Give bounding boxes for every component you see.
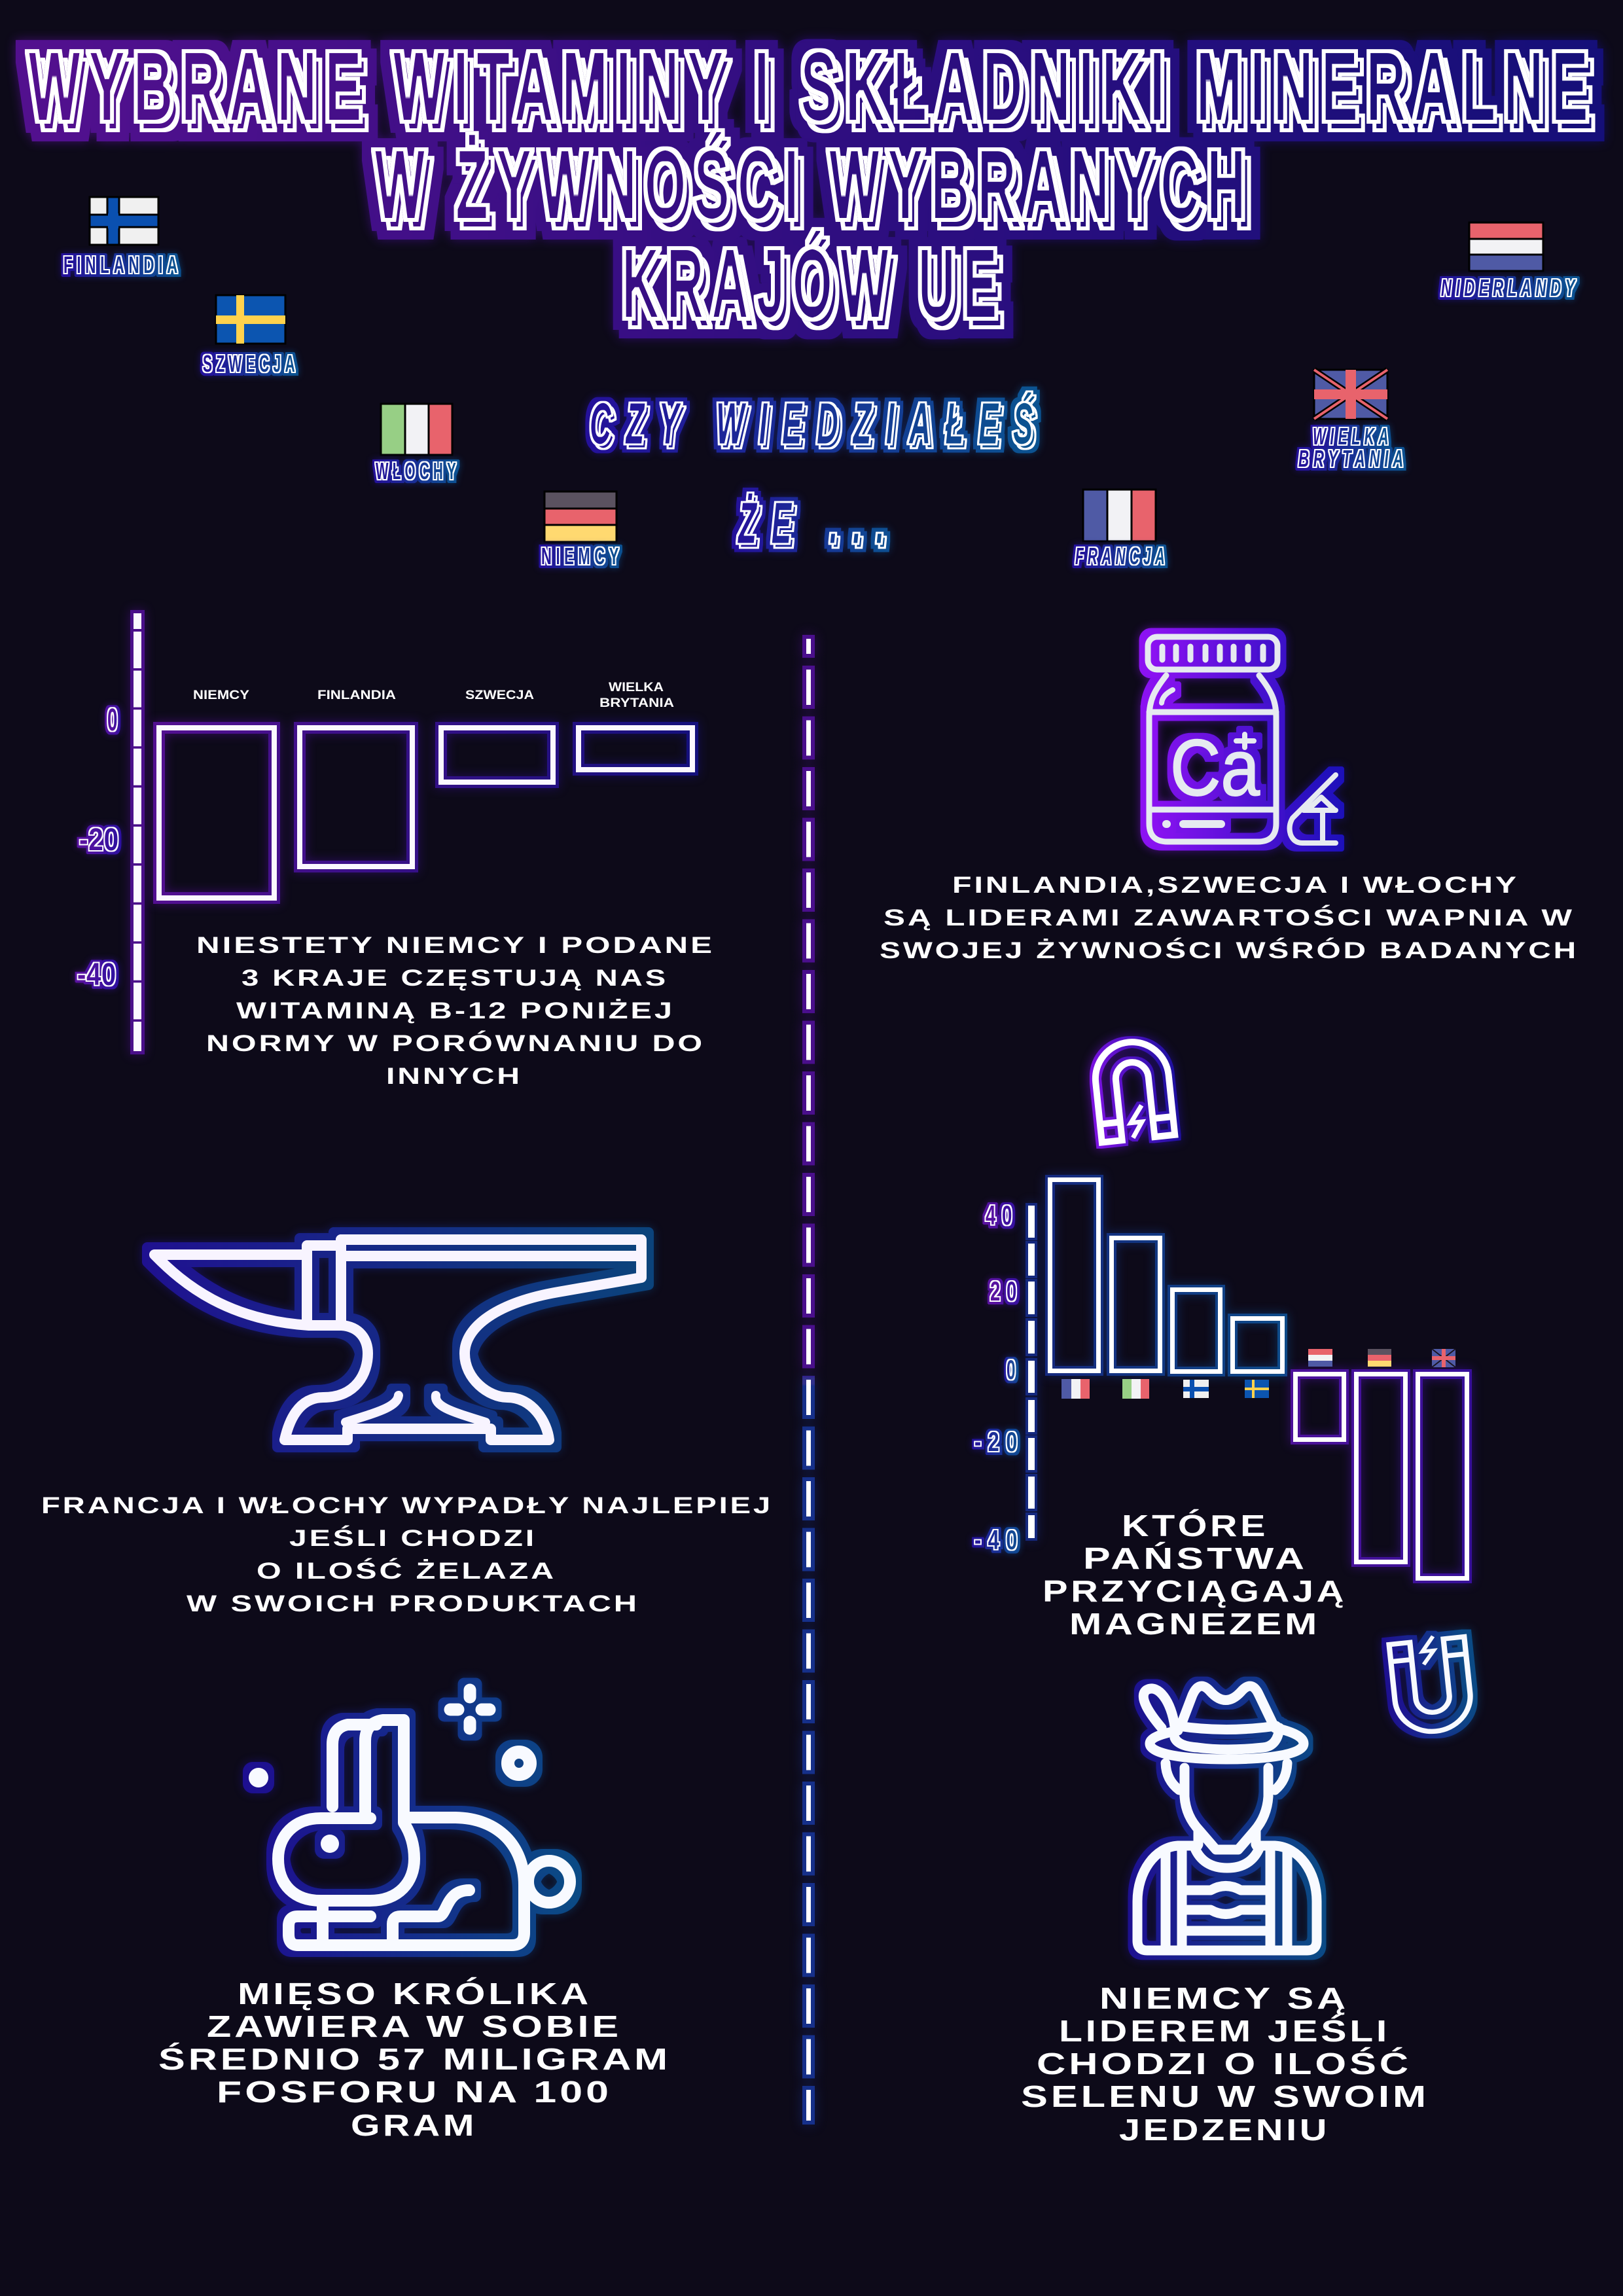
flag: Włochy: [381, 404, 452, 455]
text: B-12 caption: WITAMINĄ B-12 PONIŻEJ: [236, 998, 675, 1024]
text: selenium caption: [1021, 1981, 1429, 2147]
flag: Niemcy: [544, 492, 616, 542]
text: calcium caption: FINLANDIA,SZWECJA I WŁOCHY: [952, 872, 1519, 898]
panel: phosphorus: [158, 1690, 671, 2142]
axis tick labels: 40: [986, 1200, 1018, 1230]
icon: magnet top: [1092, 1039, 1175, 1142]
text: iron caption: W SWOICH PRODUKTACH: [187, 1591, 639, 1617]
bar labels: WIELKA: [609, 681, 664, 694]
flag labels: FINLANDIA: [63, 251, 182, 278]
text: iron caption: [41, 1493, 773, 1617]
text: phosphorus caption: ZAWIERA W SOBIE: [207, 2009, 622, 2043]
text: phosphorus caption: ŚREDNIO 57 MILIGRAM: [158, 2042, 671, 2076]
text: B-12 caption: NORMY W PORÓWNANIU DO: [206, 1030, 705, 1056]
mini flag: Niderlandy: [1308, 1349, 1332, 1367]
text: B-12 caption: [196, 933, 715, 1089]
text: selenium caption: SELENU W SWOIM: [1021, 2079, 1429, 2113]
title: [28, 33, 1596, 338]
flag labels: BRYTANIA: [1298, 445, 1408, 472]
mini flag: Francja: [1061, 1379, 1090, 1399]
text: iron caption: FRANCJA I WŁOCHY WYPADŁY NAJLEPIEJ: [41, 1493, 773, 1518]
bar labels: [193, 681, 674, 710]
axis tick labels: -40: [974, 1524, 1024, 1555]
panel: vitamin B-12 chart: [77, 613, 715, 1089]
text: calcium caption: SWOJEJ ŻYWNOŚCI WŚRÓD BADANYCH: [880, 937, 1578, 963]
text: iron caption: O ILOŚĆ ŻELAZA: [257, 1558, 556, 1584]
flag labels: [63, 251, 1579, 569]
country flags with labels: [63, 197, 1579, 569]
text: phosphorus caption: [158, 1977, 671, 2142]
mini flag: Włochy: [1122, 1379, 1149, 1399]
mini flags: [1061, 1349, 1455, 1399]
axis tick labels: 0: [1007, 1354, 1016, 1385]
text: phosphorus caption: GRAM: [351, 2108, 477, 2142]
flag: Francja: [1083, 490, 1156, 541]
panel: calcium: [880, 637, 1578, 963]
mini flag: Szwecja: [1245, 1380, 1269, 1398]
bar labels: NIEMCY: [193, 689, 249, 702]
text: iron caption: JEŚLI CHODZI: [289, 1525, 537, 1551]
icon: anvil: [154, 1240, 641, 1440]
axis tick labels: -20: [79, 823, 119, 857]
text: phosphorus caption: MIĘSO KRÓLIKA: [238, 1977, 592, 2011]
mini flag: Niemcy: [1368, 1349, 1391, 1367]
text: calcium caption: SĄ LIDERAMI ZAWARTOŚCI WAPNIA W: [883, 905, 1575, 931]
subtitle: czy wiedziałeś że: [590, 392, 1048, 555]
icon: farmer: [1137, 1686, 1317, 1950]
bar labels: FINLANDIA: [317, 689, 396, 702]
text: selenium caption: LIDEREM JEŚLI: [1059, 2014, 1390, 2048]
axis tick labels: 20: [990, 1276, 1023, 1306]
mini flag: Finlandia: [1183, 1380, 1209, 1398]
icon: magnet bottom: [1389, 1633, 1474, 1735]
text: B-12 caption: INNYCH: [386, 1064, 522, 1089]
text: magnesium caption: KTÓRE: [1122, 1509, 1268, 1543]
axis tick labels: [77, 703, 119, 992]
text: magnesium caption: PAŃSTWA: [1083, 1541, 1308, 1575]
flag: Finlandia: [90, 197, 158, 245]
axis tick labels: 0: [107, 703, 118, 738]
axis tick labels: -20: [974, 1426, 1024, 1457]
vertical centre divider: [806, 639, 811, 2121]
text: magnesium caption: PRZYCIĄGAJĄ: [1043, 1574, 1347, 1608]
text: magnesium caption: [1043, 1509, 1347, 1641]
text: calcium caption: [880, 872, 1578, 963]
text: selenium caption: JEDZENIU: [1119, 2113, 1330, 2147]
subtitle: czy wiedziałeś że: ŻE ...: [737, 492, 899, 555]
flag labels: SZWECJA: [203, 350, 299, 377]
text: B-12 caption: NIESTETY NIEMCY I PODANE: [196, 933, 715, 958]
bar labels: SZWECJA: [465, 689, 534, 702]
mini flag: Wielka Brytania: [1432, 1349, 1455, 1367]
icon: rabbit: [249, 1690, 570, 1945]
panel: selenium: [1021, 1686, 1429, 2147]
icon: calcium jar: [1148, 637, 1336, 843]
panel: iron: [41, 1240, 773, 1617]
text: phosphorus caption: FOSFORU NA 100: [217, 2075, 612, 2109]
axis tick labels: [974, 1200, 1024, 1555]
flag labels: NIEMCY: [541, 543, 623, 569]
bars: [159, 728, 692, 898]
text: B-12 caption: 3 KRAJE CZĘSTUJĄ NAS: [241, 965, 668, 991]
text: magnesium caption: MAGNEZEM: [1069, 1607, 1320, 1641]
axis: [134, 613, 141, 1051]
subtitle: czy wiedziałeś że: CZY WIEDZIAŁEŚ: [590, 392, 1048, 456]
flag: Szwecja: [216, 295, 285, 344]
icon: calcium jar: Ca: [1170, 723, 1260, 812]
axis tick labels: -40: [77, 958, 116, 992]
flag labels: FRANCJA: [1075, 543, 1169, 569]
flag labels: WIELKA: [1313, 423, 1393, 450]
axis: [1028, 1206, 1035, 1538]
bar labels: BRYTANIA: [599, 696, 674, 710]
bars above zero: [1050, 1179, 1283, 1372]
flag: Wielka Brytania: [1314, 370, 1387, 419]
title: KRAJÓW UE: [622, 230, 1005, 338]
bars below zero: [1296, 1374, 1467, 1579]
flag: Niderlandy: [1469, 223, 1543, 271]
text: selenium caption: NIEMCY SĄ: [1099, 1981, 1349, 2015]
panel: magnesium: [974, 1039, 1474, 1735]
flag labels: WŁOCHY: [376, 457, 460, 484]
text: selenium caption: CHODZI O ILOŚĆ: [1037, 2047, 1412, 2081]
